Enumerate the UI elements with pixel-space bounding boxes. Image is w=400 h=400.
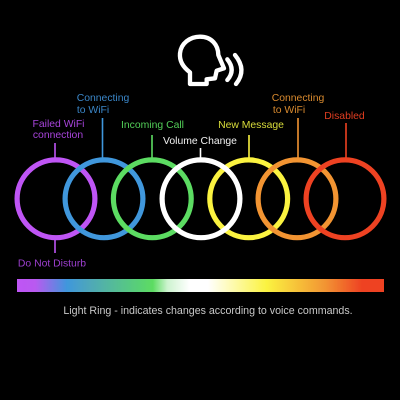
label: connecting to wifi (orange): to WiFi <box>273 105 305 116</box>
label: volume change: Volume Change <box>163 136 237 147</box>
label: failed wifi connection: connection <box>33 130 83 141</box>
label: new message: New Message <box>218 120 284 131</box>
label: failed wifi connection: Failed WiFi <box>33 119 84 130</box>
light rings <box>17 160 384 238</box>
artwork group <box>17 37 384 317</box>
spectrum bar <box>17 279 384 292</box>
label: do not disturb: Do Not Disturb <box>18 258 86 270</box>
label: incoming call: Incoming Call <box>121 120 184 131</box>
label: disabled: Disabled <box>324 111 365 122</box>
caption: Light Ring - indicates changes according to voice commands. <box>63 305 353 317</box>
label: connecting to wifi (blue): Connecting <box>77 93 129 104</box>
label: connecting to wifi (orange): Connecting <box>272 93 324 104</box>
icon: speaking head <box>180 37 241 84</box>
label: connecting to wifi (blue): to WiFi <box>77 105 109 116</box>
connector lines <box>55 118 346 253</box>
